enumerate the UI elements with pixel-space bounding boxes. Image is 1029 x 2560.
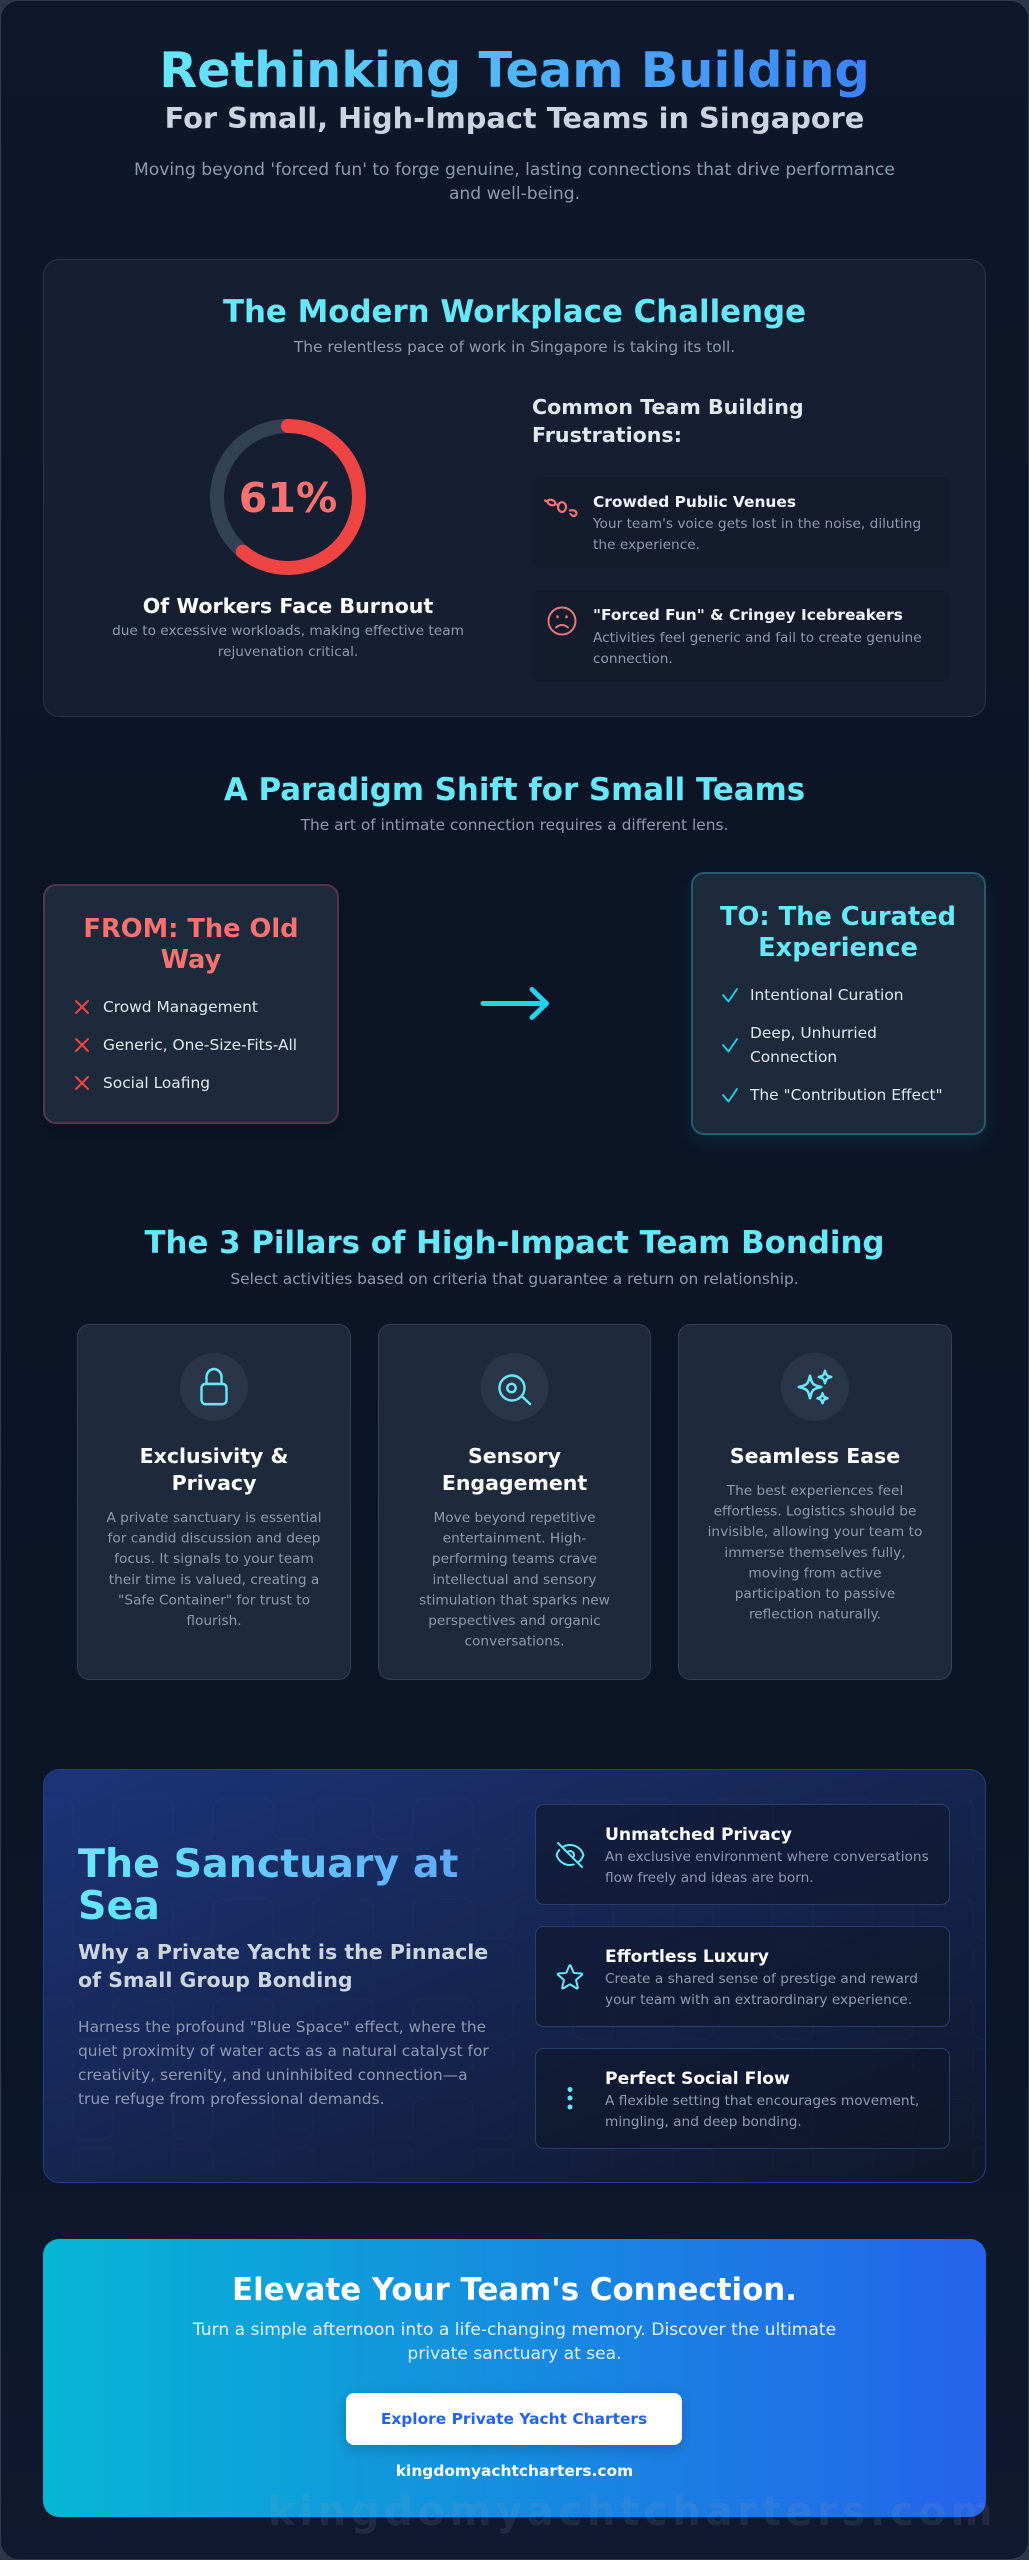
card heading: Seamless Ease [730,1444,900,1468]
panel heading: The Sanctuary at [78,1841,458,1887]
card text: stimulation that sparks new [419,1592,610,1608]
section subheading: Select activities based on criteria that guarantee a return on relationship. [230,1270,799,1288]
frustration card: forced fun: connection. [593,651,673,667]
card text: participation to passive [735,1586,895,1602]
frustration card: crowded venues: Your team's voice gets lost in the noise, diluting [592,516,921,532]
feature card: perfect social flow: A flexible setting that encourages movement, [605,2093,919,2109]
stat description: due to excessive workloads, making effective team [112,623,464,639]
panel: call to action [43,2239,986,2517]
frustration card: forced fun [532,590,950,682]
panel subheading: of Small Group Bonding [78,1968,353,1992]
frustrations heading: Common Team Building [532,395,804,419]
icon: vertical dots [568,2087,572,2110]
section: 3 pillars [78,1225,952,1680]
card text: A private sanctuary is essential [106,1510,322,1526]
card text: moving from active [748,1565,882,1581]
icon: lock [202,1369,227,1404]
card heading: FROM: The Old [83,914,299,944]
feature card: effortless luxury: your team with an extraordinary experience. [605,1992,912,2008]
section heading: The Modern Workplace Challenge [223,294,806,330]
panel heading: Sea [78,1883,160,1929]
icon: crowd [545,499,576,516]
card text: invisible, allowing your team to [708,1524,922,1540]
card text: reflection naturally. [749,1607,881,1623]
stat description: rejuvenation critical. [218,644,358,660]
card text: for candid discussion and deep [108,1531,320,1547]
list item: The "Contribution Effect" [749,1086,943,1104]
card text: The best experiences feel [726,1483,903,1499]
button [346,2393,682,2445]
icon: eye slash [557,1843,583,1867]
list item: Connection [750,1048,837,1066]
button: Explore Private Yacht Charters [381,2410,647,2428]
section heading: A Paradigm Shift for Small Teams [224,772,805,808]
section: paradigm shift [44,772,985,1134]
feature card: unmatched privacy: An exclusive environment where conversations [605,1849,929,1865]
card text: "Forced Fun" & Cringey Icebreakers [593,606,903,624]
title: Rethinking Team Building [159,41,870,99]
icon: star [558,1965,582,1988]
list item: Crowd Management [103,998,258,1016]
card: to the curated experience [692,873,985,1134]
card text: flourish. [186,1613,242,1629]
panel: the sanctuary at sea [44,1770,986,2182]
icon: sad face [548,608,576,634]
arrow [483,990,546,1018]
card text: "Safe Container" for trust to [118,1592,310,1608]
card heading: Engagement [442,1471,587,1495]
card text: entertainment. High- [443,1531,586,1547]
card text: immerse themselves fully, [724,1545,906,1561]
feature card: perfect social flow: mingling, and deep bonding. [605,2114,802,2130]
frustration card: forced fun: Activities feel generic and fail to create genuine [593,630,922,646]
card text: intellectual and sensory [433,1572,596,1588]
list item: Deep, Unhurried [750,1024,877,1042]
stat label: Of Workers Face Burnout [143,594,433,618]
feature card: unmatched privacy [536,1804,950,1904]
card heading: Exclusivity & [140,1444,289,1468]
donut chart: 61%: 61% [239,474,337,522]
feature card: effortless luxury: Create a shared sense of prestige and reward [605,1971,918,1987]
website url: kingdomyachtcharters.com [396,2462,633,2480]
icon: magnifier eye [500,1376,530,1404]
card text: Perfect Social Flow [605,2069,790,2089]
pillar card: exclusivity [78,1324,350,1680]
panel body text: true refuge from professional demands. [78,2090,384,2108]
card heading: Sensory [468,1444,561,1468]
card text: effortless. Logistics should be [714,1504,916,1520]
frustration card: crowded venues [532,477,950,568]
watermark: kingdomyachtcharters.com [268,2489,997,2535]
feature card: unmatched privacy: flow freely and ideas are born. [605,1870,814,1886]
feature card: effortless luxury [536,1926,950,2026]
list item [723,1024,877,1066]
panel subheading: Why a Private Yacht is the Pinnacle [78,1940,488,1964]
cta text: Turn a simple afternoon into a life-changing memory. Discover the ultimate [192,2320,836,2340]
card text: their time is valued, creating a [109,1572,319,1588]
section heading: The 3 Pillars of High-Impact Team Bonding [144,1225,885,1261]
card text: Crowded Public Venues [593,493,796,511]
card heading: Way [161,945,222,975]
panel: the modern workplace challenge [44,260,986,716]
card: from the old way [44,885,338,1123]
card heading: Privacy [172,1471,256,1495]
list item: Social Loafing [103,1074,210,1092]
icon: sparkles [799,1371,831,1403]
card text: Effortless Luxury [605,1947,769,1967]
list item: Intentional Curation [750,986,904,1004]
list item: Generic, One-Size-Fits-All [103,1036,297,1054]
card text: performing teams crave [432,1551,597,1567]
panel body text: quiet proximity of water acts as a natural catalyst for [78,2042,489,2060]
cta heading: Elevate Your Team's Connection. [232,2272,797,2308]
frustration card: crowded venues: the experience. [593,537,700,553]
tagline: and well-being. [449,184,580,204]
pillar card: sensory [378,1324,650,1680]
header [134,41,895,204]
section subheading: The art of intimate connection requires a different lens. [300,816,728,834]
cta text: private sanctuary at sea. [407,2344,622,2364]
card heading: Experience [758,933,918,963]
frustrations heading: Frustrations: [532,423,682,447]
card text: Unmatched Privacy [605,1825,792,1845]
feature card: perfect social flow [536,2048,950,2148]
panel body text: Harness the profound "Blue Space" effect, where the [78,2018,486,2036]
donut chart: 61% [217,426,359,568]
card heading: TO: The Curated [720,902,956,932]
subtitle: For Small, High-Impact Teams in Singapore [165,101,864,135]
card text: focus. It signals to your team [114,1551,314,1567]
pillar card: seamless [678,1324,952,1680]
card text: conversations. [465,1634,564,1650]
tagline: Moving beyond 'forced fun' to forge genuine, lasting connections that drive performance [134,160,895,180]
card text: perspectives and organic [428,1613,601,1629]
panel body text: creativity, serenity, and uninhibited connection—a [78,2066,468,2084]
card text: Move beyond repetitive [433,1510,596,1526]
section subheading: The relentless pace of work in Singapore is taking its toll. [293,338,735,356]
